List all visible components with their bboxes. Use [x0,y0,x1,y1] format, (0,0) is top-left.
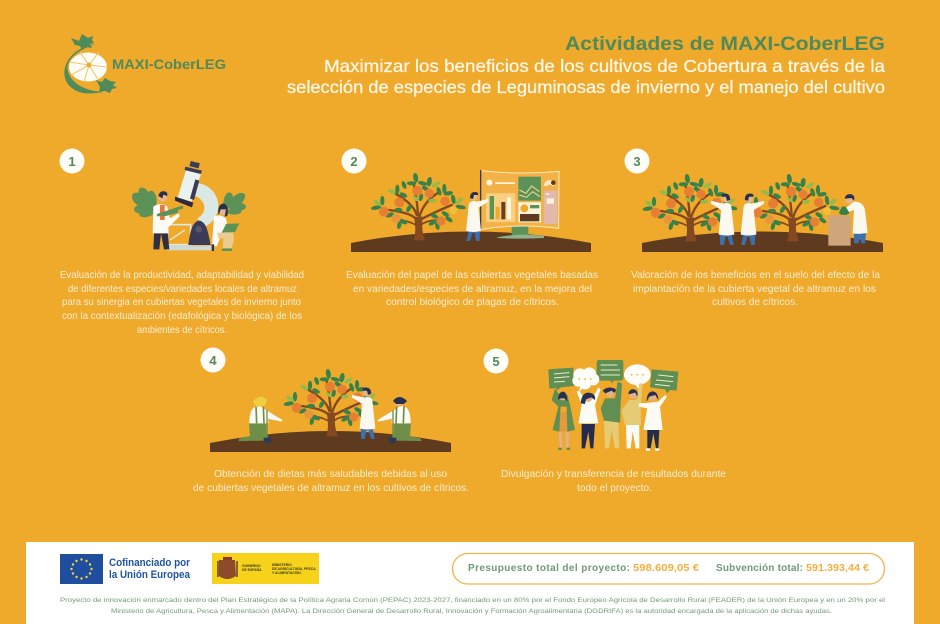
person 3 [601,382,622,448]
illustration: people with speech bubbles [548,360,678,451]
EU flag [60,554,103,584]
text: activity 3: implantación de la cubierta vegetal de altramuz en los [633,283,876,295]
text: activity 4 [193,468,469,494]
text: activity 1 [60,269,304,336]
scientist [352,388,375,439]
footer panel [26,542,914,624]
logo: MAXI-CoberLEG: MAXI-CoberLEG [112,57,226,72]
number badge 5 [484,348,508,374]
lab table with flask and scientist [828,194,868,246]
orange trees [643,174,839,241]
funding note: Ministerio de Agricultura, Pesca y Alimentación (MAPA). La Dirección General de Desarrollo Rural, Innovación y Formación Agroalimentaria (DGDRIFA) es la autoridad encargada de la aplicación de dichas ayudas. [111,608,832,615]
farmers kneeling [238,397,422,444]
cloud speech bubble [572,367,599,392]
text: activity 4: de cubiertas vegetales de altramuz en los cultivos de cítricos. [193,482,469,494]
panel: activity 2 [342,148,598,308]
number badge 2 [342,148,366,174]
text: activity 3 [631,269,880,308]
funding note: Proyecto de innovación enmarcado dentro del Plan Estratégico de la Política Agraria Común (PEPAC) 2023-2027, financiado en un 80% por el Fondo Europeo Agrícola de Desarrollo Rural (FEADER) de la Unión Europea y en un 20% por el [60,597,886,604]
Spanish government logo: GOBIERNO [242,564,261,568]
number badge 3 [624,148,650,174]
text: activity 2 [346,269,598,308]
text: activity 5: Divulgación y transferencia de resultados durante [501,468,726,480]
Spanish government logo: DE AGRICULTURA, PESCA [272,567,316,571]
Spanish government logo: Y ALIMENTACIÓN [272,570,301,575]
scientist with plant [153,191,182,249]
subtitle [287,56,885,97]
title: Actividades de MAXI-CoberLEG [565,34,885,55]
budget pill: 591.393,44 € [806,563,869,574]
text: activity 3: Valoración de los beneficios en el suelo del efecto de la [631,269,880,281]
number badge 4 [200,348,226,372]
text: activity 1: para su sinergia en cubiertas vegetales de invierno junto [62,296,301,308]
number badge 5: 5 [492,354,500,369]
ground [210,431,451,452]
orange tree [371,173,466,240]
panel: activity 1 [60,148,304,336]
subtitle: Maximizar los beneficios de los cultivos de Cobertura a través de la [324,56,885,76]
text: activity 3: cultivos de cítricos. [712,296,798,308]
number badge 3: 3 [633,154,641,169]
EU cofunding label: la Unión Europea [109,569,191,581]
dashboard monitor [480,170,559,239]
ground [642,232,883,252]
text: activity 2: en variedades/especies de altramuz, en la mejora del [353,283,592,295]
number badge 1 [60,148,84,174]
text: activity 1: de diferentes especies/variedades locales de altramuz [68,283,297,295]
text: activity 1: con la contextualización (edafológica y biológica) de los [62,310,302,322]
person 1 [552,388,575,450]
text: activity 1: ambientes de cítricos. [137,324,227,336]
number badge 1: 1 [68,154,76,169]
illustration: microscope and scientists [129,161,248,251]
text: activity 1: Evaluación de la productividad, adaptabilidad y viabilidad [60,269,304,281]
orange tree [284,369,378,436]
number badge 4: 4 [209,353,217,368]
budget pill: Subvención total: [716,563,803,574]
ground [351,232,591,252]
Spanish government logo [212,553,319,584]
EU cofunding label [109,557,191,581]
text: activity 4: Obtención de dietas más saludables debidas al uso [214,468,447,480]
person 4 [621,383,643,448]
text: activity 5: todo el proyecto. [577,482,652,494]
oval speech bubble [624,364,651,391]
text: activity 2: control biológico de plagas de cítricos. [386,296,559,308]
text: activity 2: Evaluación del papel de las cubiertas vegetales basadas [346,269,598,281]
panel: activity 5 [484,348,726,494]
budget pill: 598.609,05 € [633,563,699,574]
person 5 [638,391,667,451]
scientist with laptop [212,203,239,251]
Spanish government logo: DE ESPAÑA [242,567,262,572]
EU cofunding label: Cofinanciado por [109,557,191,569]
subtitle: selección de especies de Leguminosas de invierno y el manejo del cultivo [287,77,885,97]
text: activity 5 [501,468,726,494]
Spanish government logo: MINISTERIO [272,563,292,567]
panel: activity 4 [193,348,469,494]
funding note [60,597,886,615]
panel: activity 3 [624,148,883,308]
budget pill: Presupuesto total del proyecto: [468,563,630,574]
scientists at trees [711,194,764,245]
number badge 2: 2 [350,154,358,169]
logo: MAXI-CoberLEG [64,34,226,93]
person 2 [577,387,601,448]
budget pill [452,554,884,584]
scientist [466,192,488,241]
